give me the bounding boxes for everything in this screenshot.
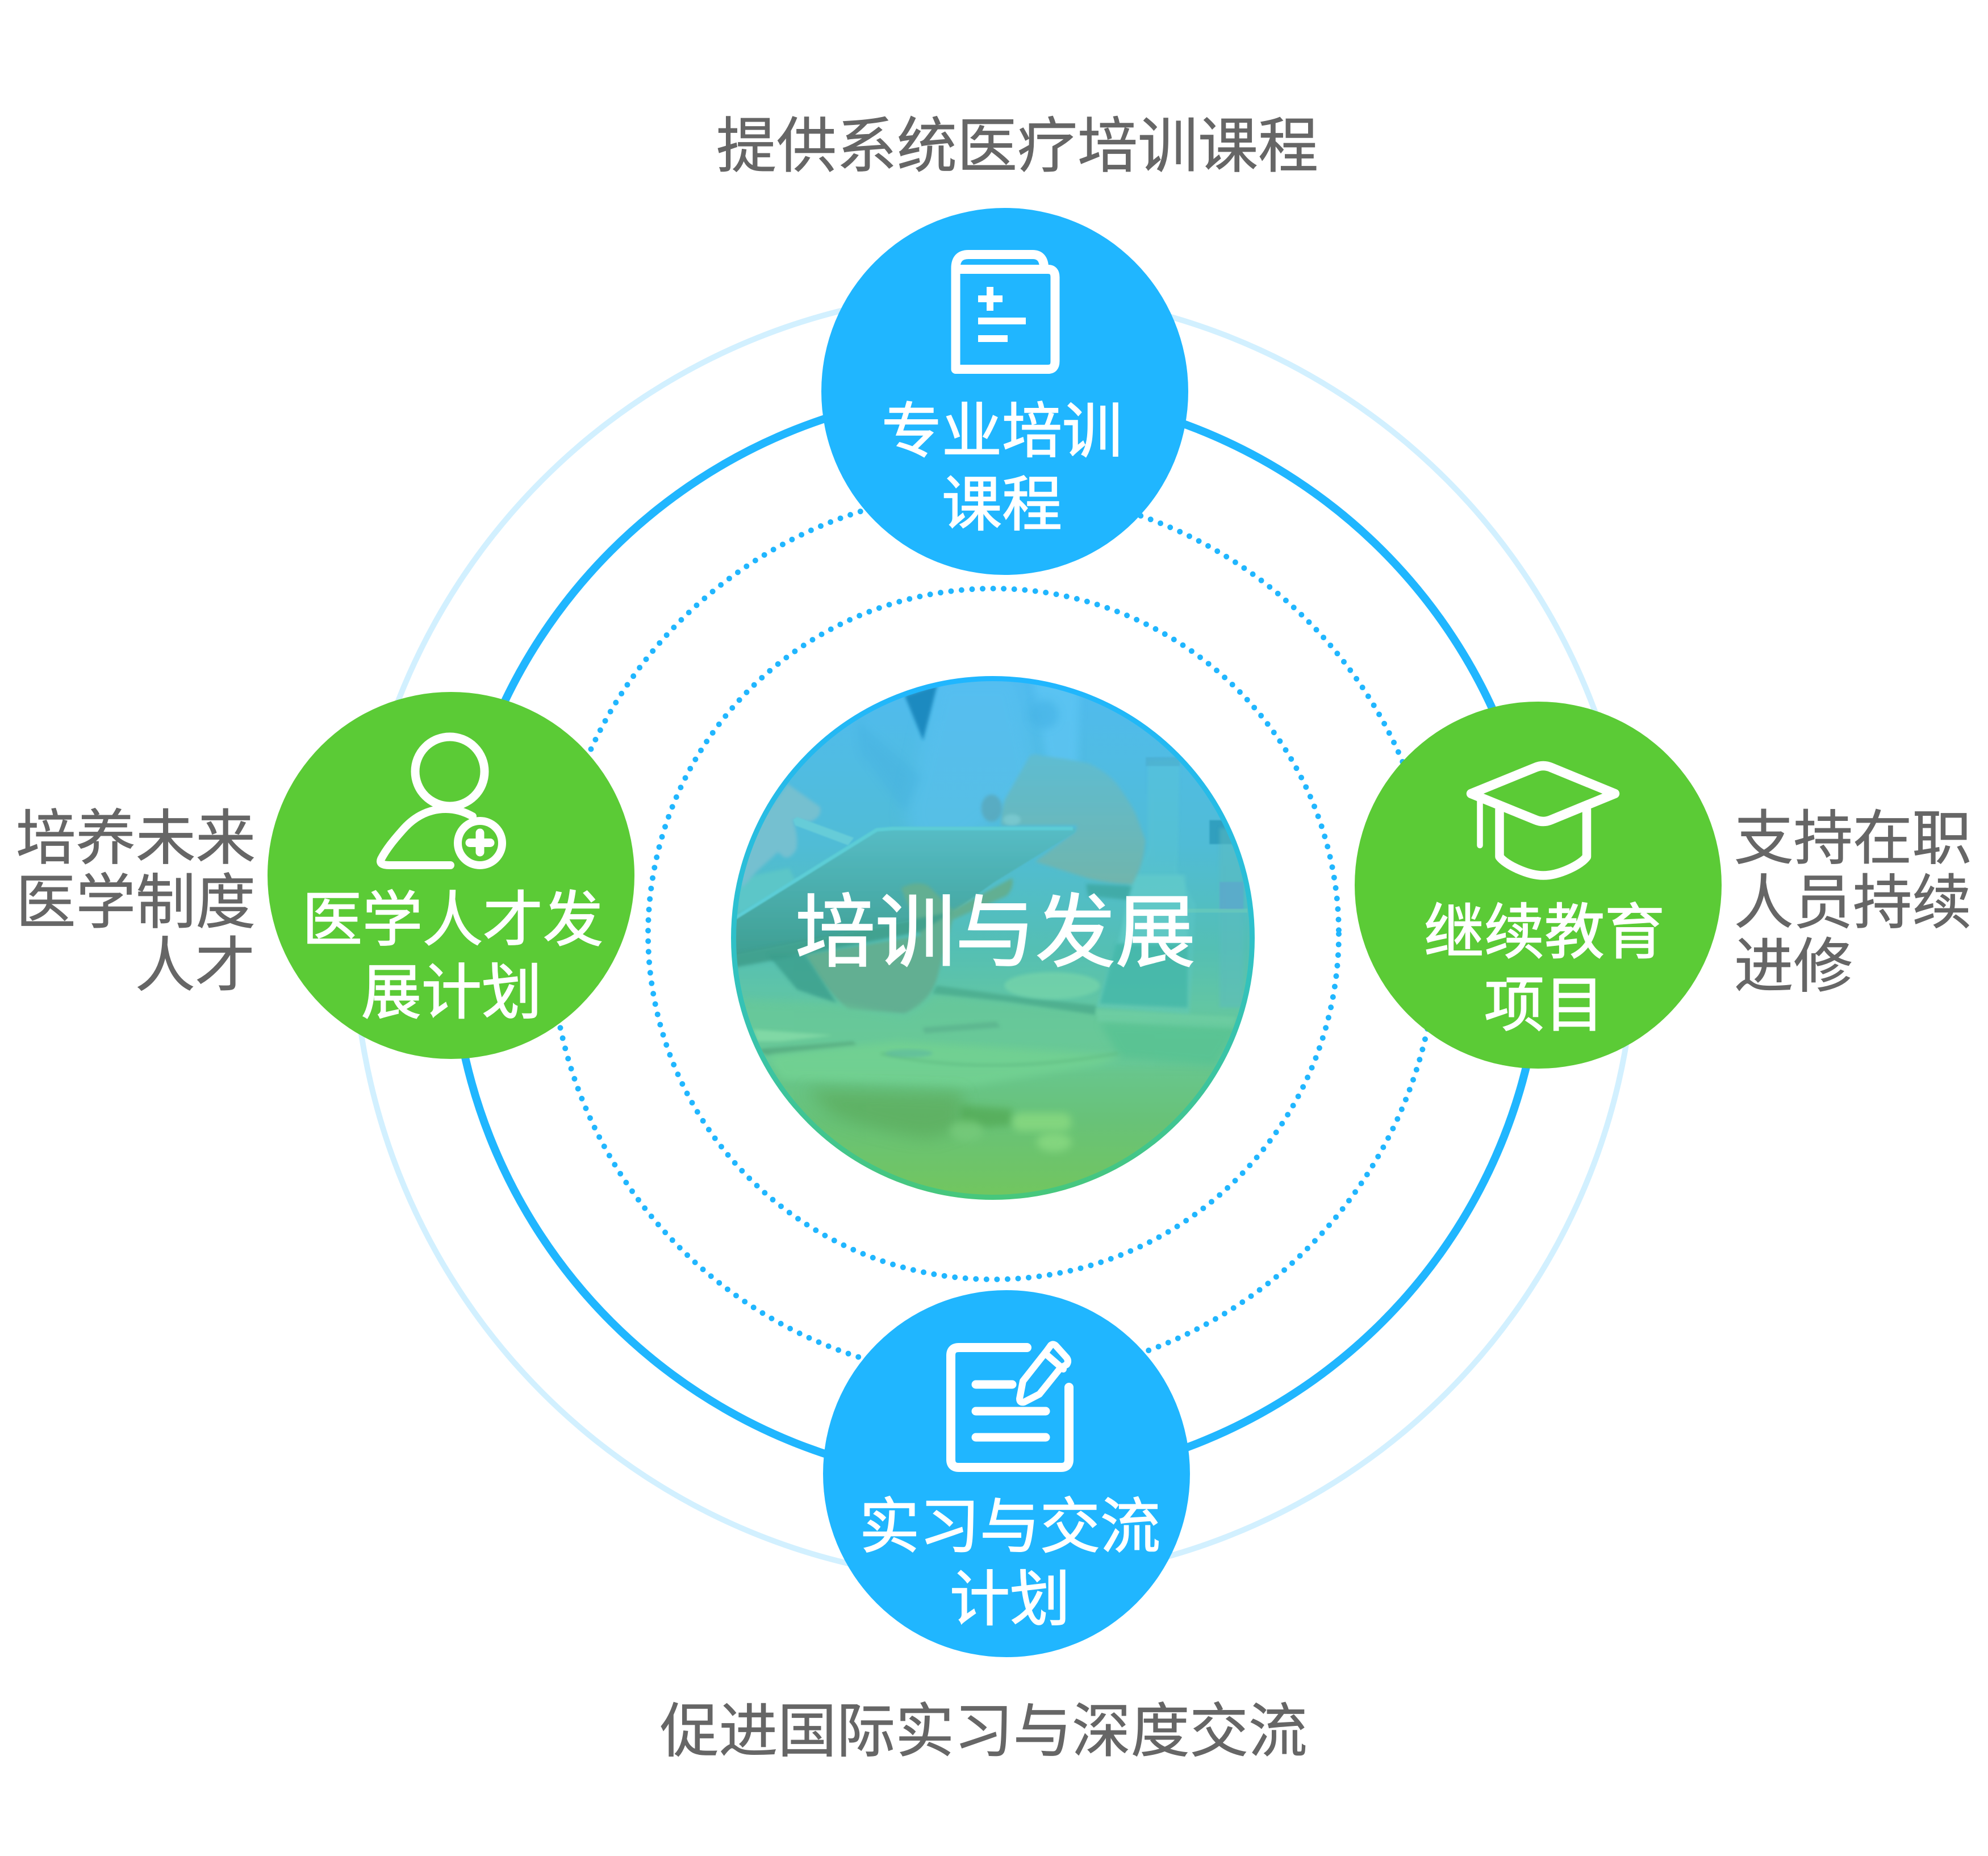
main blue ring — [452, 391, 1542, 1482]
node title line 2: 展计划 — [361, 960, 542, 1027]
outer dotted ring — [550, 491, 1438, 1378]
lower hand — [805, 1089, 962, 1139]
right label: 人员持续 — [1734, 870, 1972, 936]
node title: 实习与交流 — [859, 1494, 1160, 1561]
right label — [1734, 806, 1972, 1000]
icon: person with medical cross — [381, 737, 502, 865]
outer light ring — [354, 292, 1635, 1580]
node: internship and exchange plan — [823, 1290, 1190, 1657]
node: medical talent development plan — [268, 692, 634, 1059]
inner dotted ring — [648, 589, 1339, 1279]
table — [745, 996, 1025, 1010]
icon: graduation cap — [1471, 766, 1615, 875]
right hand — [1001, 754, 1146, 885]
left label — [16, 805, 256, 999]
flask and tubes — [1098, 956, 1191, 1013]
icon: note and pencil — [951, 1344, 1069, 1467]
hand under tablet — [805, 878, 1013, 1013]
left hand and stylus — [740, 870, 793, 911]
node title line 2: 计划 — [950, 1566, 1070, 1633]
paper — [771, 1044, 1100, 1085]
center photo circle — [733, 677, 1253, 1198]
node title: 继续教育 — [1424, 899, 1665, 966]
node title line 2: 课程 — [942, 472, 1062, 539]
left label: 人才 — [135, 932, 255, 999]
node title: 医学人才发 — [302, 887, 603, 954]
node title: 专业培训 — [882, 398, 1122, 465]
top label: 提供系统医疗培训课程 — [716, 113, 1318, 180]
right label: 进修 — [1734, 933, 1853, 1000]
left label: 培养未来 — [16, 805, 256, 872]
right node: continuing education project — [1355, 702, 1722, 1069]
center title: 培训与发展 — [795, 887, 1196, 977]
node title line 2: 项目 — [1484, 972, 1605, 1039]
right label: 支持在职 — [1734, 806, 1972, 872]
icon: book — [955, 255, 1055, 369]
left label: 医学制度 — [16, 869, 256, 936]
tablet — [733, 827, 1075, 956]
coat and background — [911, 768, 1019, 826]
bottom label: 促进国际实习与深度交流 — [660, 1698, 1308, 1764]
node: professional training courses — [821, 208, 1188, 575]
